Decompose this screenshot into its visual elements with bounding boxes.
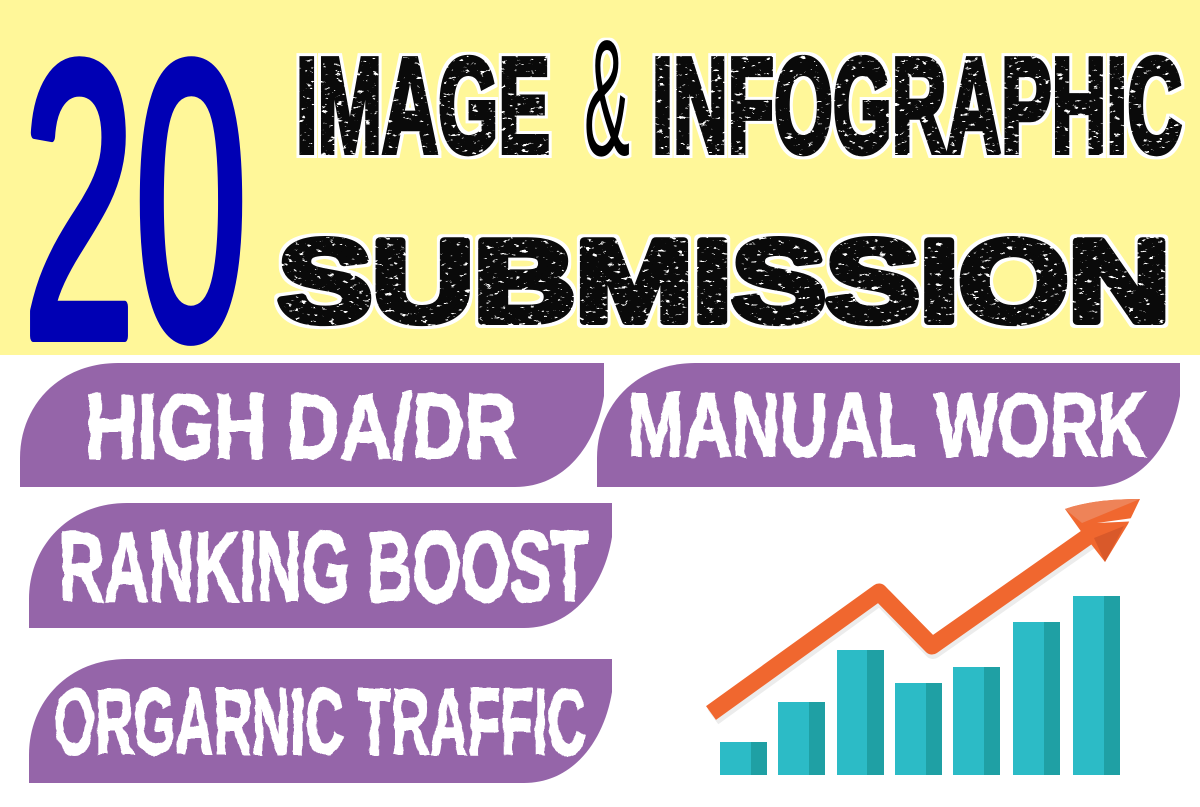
chart: rising bars with arrow (711, 499, 1140, 775)
panel: organic traffic (29, 659, 612, 783)
bar 6 (1013, 622, 1060, 775)
panel: manual work (597, 363, 1180, 487)
bar 5 (953, 667, 1000, 775)
infographic canvas: & (584, 6, 630, 191)
bar 3 (837, 650, 884, 775)
heading: image: IMAGE (296, 30, 550, 181)
yellow header band (0, 0, 1200, 355)
bar 1 (720, 742, 767, 775)
label: organic traffic: ORGARNIC TRAFFIC (54, 669, 586, 774)
panel: high da/dr (20, 363, 604, 487)
label: high da/dr: HIGH DA/DR (85, 376, 517, 478)
label: ranking boost: RANKING BOOST (59, 511, 589, 623)
bar 2 (778, 702, 825, 775)
heading: submission: SUBMISSION (278, 216, 1170, 346)
bar 4 (895, 683, 942, 775)
arrow: upward trend (711, 499, 1140, 717)
panel: ranking boost (29, 503, 612, 628)
bar 7 (1073, 596, 1120, 775)
